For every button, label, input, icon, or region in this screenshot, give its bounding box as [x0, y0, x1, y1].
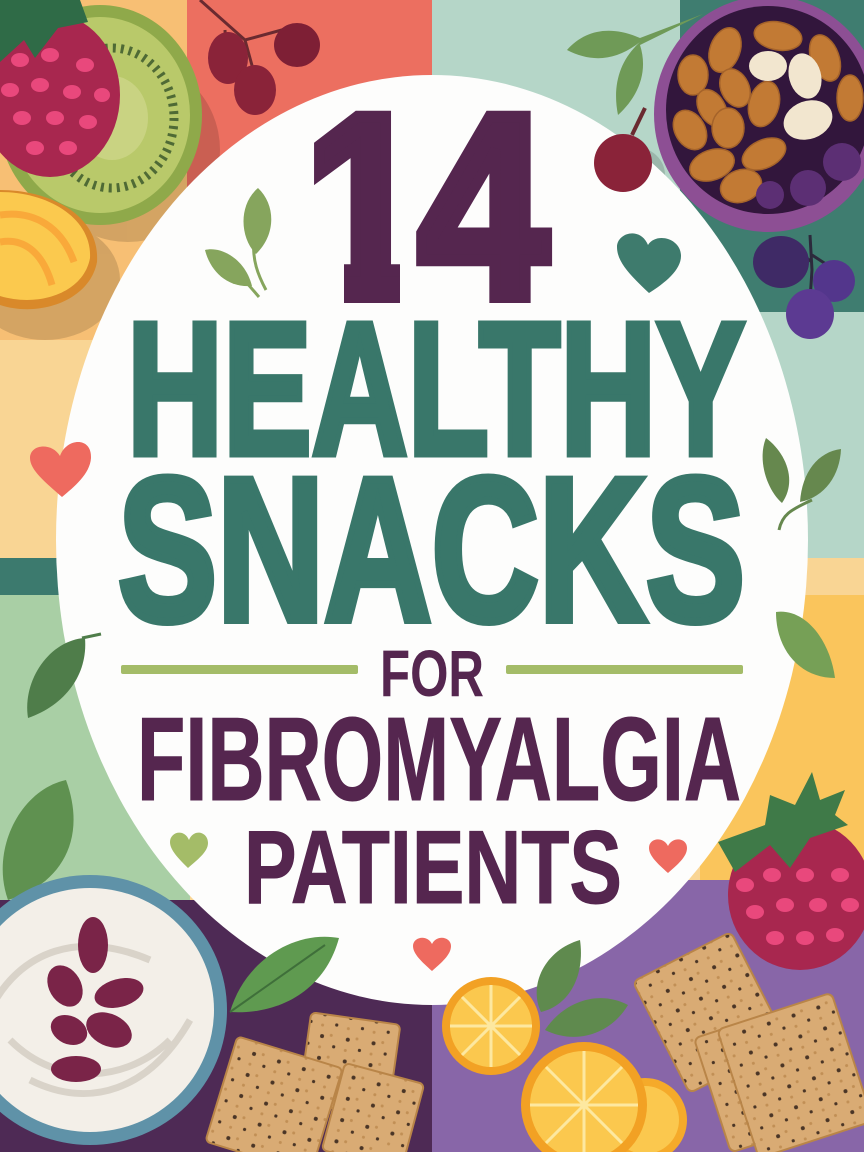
white central panel	[56, 75, 808, 1005]
icon: leaf lower left	[3, 780, 74, 900]
icon: purple berries	[753, 235, 855, 339]
title number: 14	[314, 110, 552, 303]
icon: red heart bottom	[413, 938, 451, 971]
icon: leaves by oranges	[537, 940, 628, 1037]
icon: leaf by bowl	[230, 937, 339, 1012]
icon: teal heart	[617, 233, 681, 293]
icon: green heart	[170, 833, 208, 868]
icon: raspberry bottom right	[718, 772, 864, 970]
icon: leaf left	[27, 634, 101, 718]
divider left	[121, 665, 358, 674]
icon: raspberry top left	[0, 0, 120, 177]
title number: 14: 1	[304, 60, 427, 353]
icon: orange slices	[442, 977, 687, 1152]
divider right	[506, 665, 743, 674]
icon: kiwi slice	[0, 5, 202, 225]
icon: sprig top left of title	[205, 188, 271, 297]
heading: PATIENTS: PATIENTS	[244, 810, 622, 926]
icon: sprig right	[763, 438, 841, 530]
icon: leaf sprig top	[567, 14, 703, 115]
title number: 14: 4	[418, 60, 549, 353]
icon: mango slice	[0, 190, 97, 309]
icon: red heart right	[649, 839, 687, 873]
icon: cherries	[200, 0, 320, 115]
icon: leaf right	[776, 612, 835, 678]
food shadows	[0, 58, 665, 340]
icon: crackers left	[205, 1012, 424, 1152]
icon: single cherry	[594, 108, 652, 192]
icon: yogurt bowl	[0, 875, 227, 1145]
heading: FOR: FOR	[380, 636, 484, 710]
icon: crackers right	[633, 932, 864, 1152]
icon: red heart left	[30, 442, 91, 497]
icon: nut bowl	[654, 0, 864, 232]
